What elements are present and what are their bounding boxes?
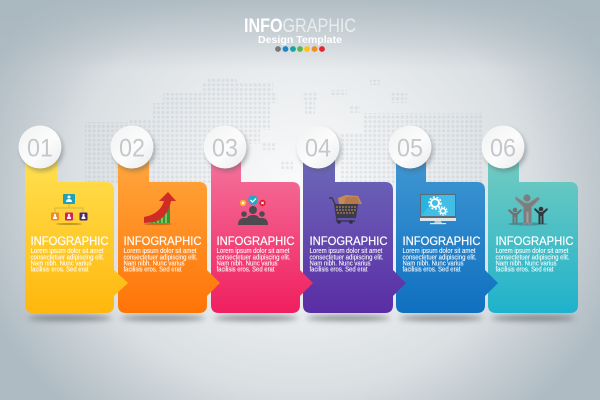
title: Design Template [258, 34, 342, 46]
number badge 05: 05 [397, 134, 423, 162]
body text: facilisis eros. Sed erat [30, 265, 88, 274]
heading: INFOGRAPHIC [216, 234, 295, 248]
panel: step 03 [211, 160, 313, 313]
body text: Lorem ipsum dolor sit amet [496, 246, 568, 255]
body text: consectetuer adipiscing elit. [30, 252, 104, 261]
title [244, 16, 356, 52]
number badge 03 [204, 126, 248, 172]
title color dots [275, 46, 325, 52]
body text: Lorem ipsum dolor sit amet [124, 246, 196, 255]
body text [496, 246, 570, 274]
heading: INFOGRAPHIC [402, 234, 481, 248]
body text: Nam nibh. Nunc varius [216, 258, 278, 268]
number badge 02 [110, 126, 156, 172]
body text: Lorem ipsum dolor sit amet [310, 246, 382, 255]
dotted world map [85, 79, 482, 185]
number badge 06: 06 [490, 134, 516, 162]
body text [216, 246, 290, 274]
body text: facilisis eros. Sed erat [402, 265, 460, 274]
body text: Nam nibh. Nunc varius [310, 258, 371, 268]
heading: INFOGRAPHIC [496, 234, 574, 248]
body text: Lorem ipsum dolor sit amet [402, 246, 476, 255]
body text: facilisis eros. Sed erat [496, 265, 554, 274]
panel: step 05 [396, 160, 498, 313]
icon: shopping cart [329, 195, 362, 224]
body text: facilisis eros. Sed erat [216, 265, 274, 274]
title: INFOGRAPHIC [244, 16, 356, 37]
body text: Nam nibh. Nunc varius [496, 258, 557, 268]
number badge 05 [388, 126, 434, 172]
heading: INFOGRAPHIC [310, 234, 388, 248]
icon: growth arrow chart [144, 192, 176, 225]
body text: Nam nibh. Nunc varius [30, 258, 92, 268]
body text [30, 246, 104, 274]
number badge 03: 03 [212, 134, 238, 162]
number badge 06 [482, 126, 526, 172]
number badge 04: 04 [305, 134, 331, 162]
body text: Lorem ipsum dolor sit amet [216, 246, 290, 255]
panel: step 02 [118, 160, 220, 313]
card shadows [28, 315, 575, 321]
number badge 01 [18, 126, 64, 172]
body text [310, 246, 384, 274]
body text: Nam nibh. Nunc varius [402, 258, 464, 268]
body text: facilisis eros. Sed erat [124, 265, 182, 274]
number badge 04 [296, 126, 342, 172]
panel: step 06 [488, 160, 578, 313]
heading: INFOGRAPHIC [30, 234, 109, 248]
body text: Lorem ipsum dolor sit amet [30, 246, 104, 255]
body text: consectetuer adipiscing elit. [310, 252, 384, 261]
body text: facilisis eros. Sed erat [310, 265, 368, 274]
icon: team with checkmarks [238, 195, 268, 225]
body text [402, 246, 476, 274]
icon: monitor with gears [420, 194, 456, 224]
icon: family [508, 194, 548, 226]
number badge 02: 02 [119, 134, 145, 162]
body text: consectetuer adipiscing elit. [496, 252, 570, 261]
body text [124, 246, 198, 274]
body text: consectetuer adipiscing elit. [124, 252, 198, 261]
panel: step 04 [303, 160, 406, 313]
number badge 01: 01 [27, 134, 53, 162]
panel: step 01 [25, 160, 128, 313]
body text: Nam nibh. Nunc varius [124, 258, 185, 268]
body text: consectetuer adipiscing elit. [216, 252, 290, 261]
icon: org chart [51, 194, 88, 225]
heading: INFOGRAPHIC [124, 234, 202, 248]
body text: consectetuer adipiscing elit. [402, 252, 476, 261]
